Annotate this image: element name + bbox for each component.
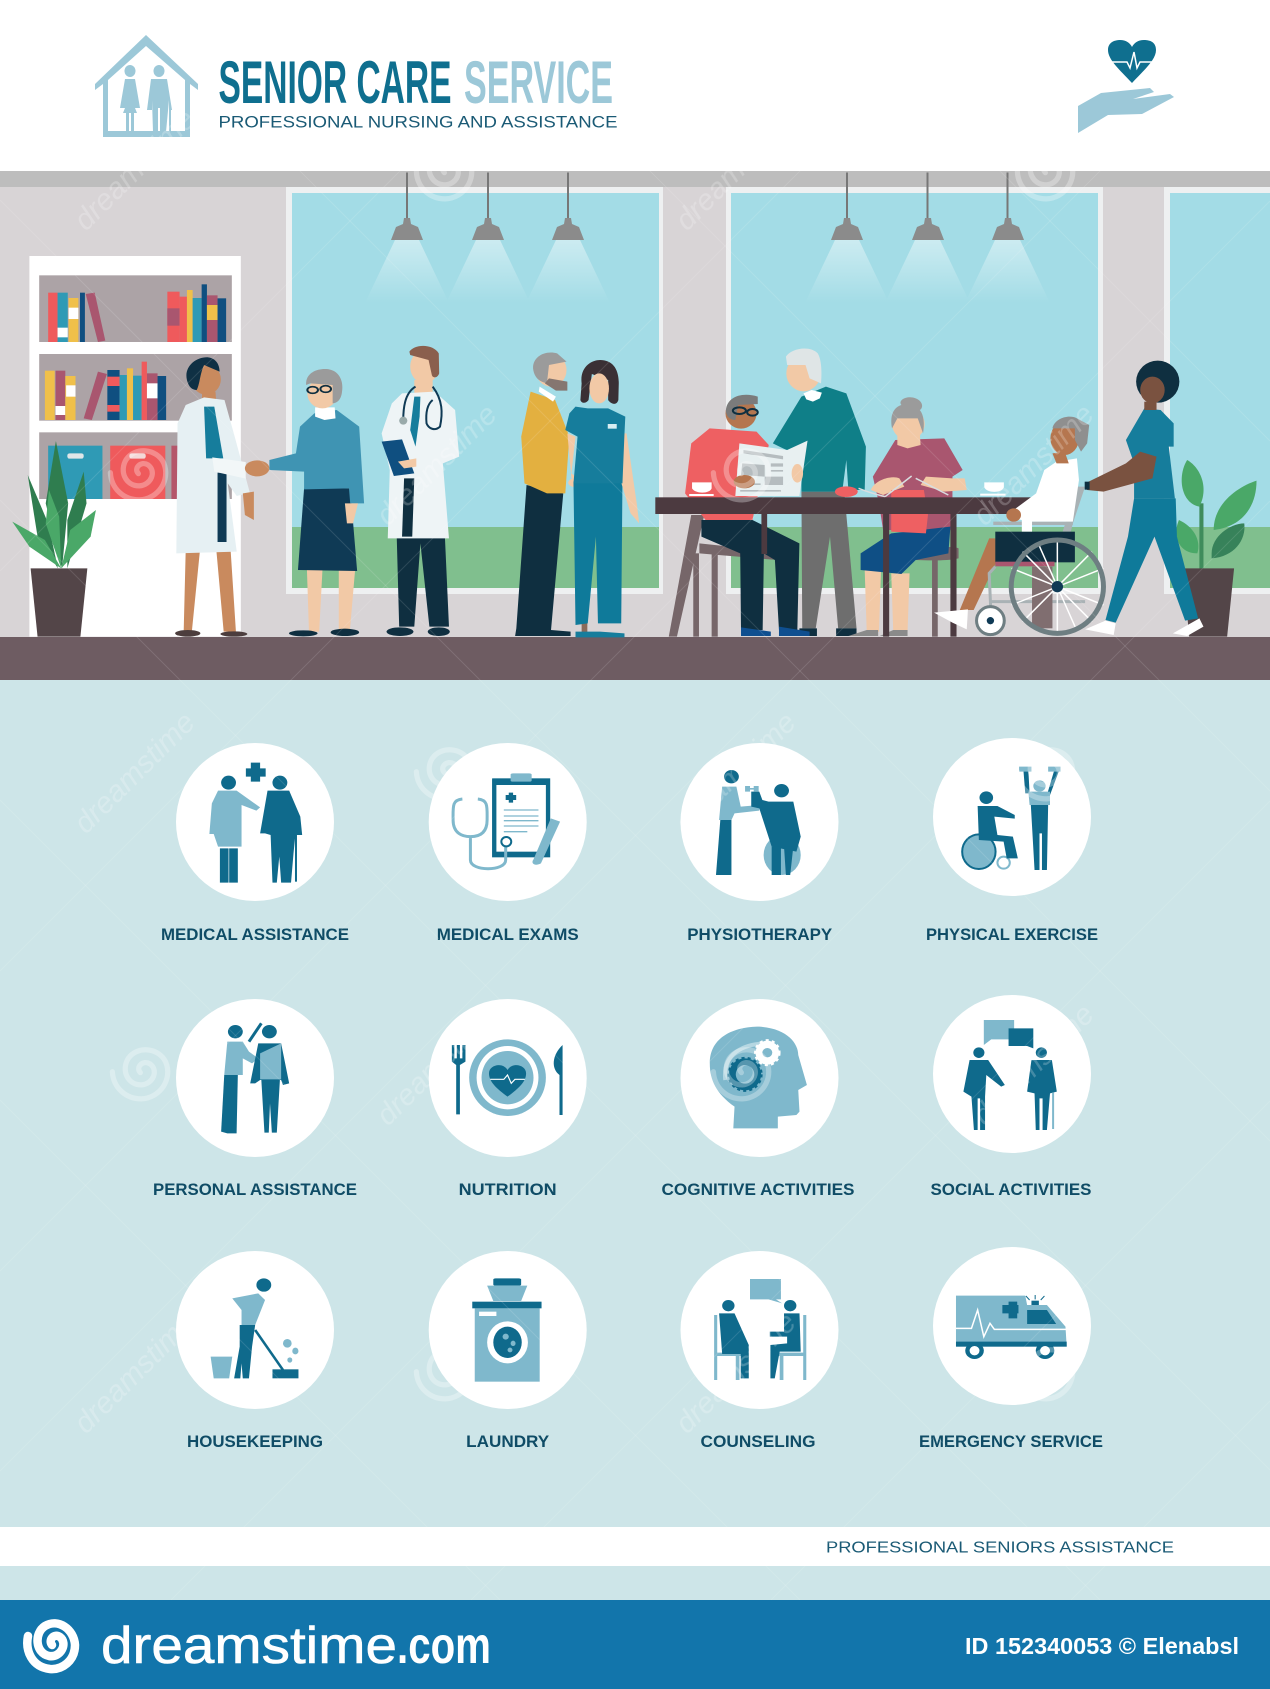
service labels: PHYSIOTHERAPY bbox=[687, 925, 833, 944]
title: SENIOR CARE bbox=[218, 49, 452, 116]
icon: nutrition bbox=[452, 1039, 563, 1116]
left half of scene bbox=[12, 256, 639, 637]
books middle shelf bbox=[45, 362, 166, 420]
dreamstime logo: .com bbox=[397, 1617, 491, 1675]
stock watermark: dreamstime bbox=[669, 706, 803, 840]
service labels bbox=[153, 925, 1103, 1451]
table bbox=[655, 482, 1039, 637]
dreamstime logo bbox=[27, 1617, 491, 1675]
newspaper bbox=[734, 441, 808, 496]
footer bar bbox=[0, 1600, 1270, 1689]
footer caption: PROFESSIONAL SENIORS ASSISTANCE bbox=[826, 1540, 1174, 1556]
right half of scene bbox=[655, 349, 1257, 637]
title: SERVICE bbox=[464, 49, 613, 116]
storage boxes bbox=[48, 446, 188, 499]
books top shelf bbox=[48, 284, 226, 342]
left chair bbox=[669, 515, 777, 637]
logo: house with seniors bbox=[95, 35, 198, 137]
icon: personal assistance bbox=[221, 1023, 289, 1133]
icon: physical exercise bbox=[962, 767, 1061, 870]
service labels: NUTRITION bbox=[459, 1180, 557, 1199]
icon: heart in hand bbox=[1078, 40, 1174, 133]
senior woman in blue sweater bbox=[269, 369, 364, 636]
stock watermark: dreamstime bbox=[967, 998, 1101, 1132]
icon: emergency service bbox=[956, 1295, 1067, 1359]
service labels: PHYSICAL EXERCISE bbox=[926, 925, 1098, 944]
icon: housekeeping bbox=[211, 1278, 298, 1378]
window right bbox=[1164, 187, 1270, 594]
service labels: COGNITIVE ACTIVITIES bbox=[662, 1180, 854, 1199]
nurse pushing wheelchair bbox=[1085, 361, 1203, 636]
stock watermark: dreamstime bbox=[669, 103, 803, 237]
seated man in red sweater bbox=[685, 395, 810, 636]
service labels: EMERGENCY SERVICE bbox=[919, 1432, 1103, 1451]
panel: services background bbox=[0, 680, 1270, 1600]
woman doctor bbox=[175, 357, 269, 637]
wheelchair with senior bbox=[934, 417, 1103, 635]
standing man in teal sweater bbox=[773, 349, 866, 636]
cups bbox=[689, 482, 1006, 496]
icons row 3 bbox=[211, 1278, 1067, 1382]
icon: medical assistance bbox=[209, 763, 302, 883]
panel: room scene bbox=[0, 171, 1270, 680]
image id credit: ID 152340053 © Elenabsl bbox=[965, 1633, 1239, 1659]
nurse with long hair bbox=[565, 360, 639, 637]
plant right bbox=[1176, 460, 1257, 637]
stock watermark: dreamstime bbox=[68, 1306, 202, 1440]
icons row 2 bbox=[221, 1020, 1057, 1133]
window left bbox=[286, 187, 663, 594]
service labels: HOUSEKEEPING bbox=[187, 1432, 323, 1451]
ceiling lamps bbox=[365, 173, 1050, 303]
stock watermark: dreamstime bbox=[967, 398, 1101, 532]
senior man with cane bbox=[515, 352, 587, 636]
service labels: PERSONAL ASSISTANCE bbox=[153, 1180, 357, 1199]
footer strip bbox=[0, 1527, 1270, 1566]
plant left bbox=[12, 441, 96, 637]
right chair bbox=[916, 547, 959, 637]
service labels: COUNSELING bbox=[700, 1432, 816, 1451]
window centre bbox=[726, 187, 1103, 594]
stock watermark: dreamstime bbox=[669, 1306, 803, 1440]
icon: laundry bbox=[472, 1278, 542, 1382]
dreamstime logo: dreamstime bbox=[101, 1617, 397, 1675]
service labels: MEDICAL ASSISTANCE bbox=[161, 925, 349, 944]
icons row 1 bbox=[209, 763, 1061, 883]
stock watermark: dreamstime bbox=[370, 398, 504, 532]
male doctor bbox=[382, 346, 459, 636]
ceiling band bbox=[0, 171, 1270, 187]
icon: counseling bbox=[714, 1279, 806, 1380]
stock watermark: dreamstime bbox=[68, 103, 202, 237]
service labels: LAUNDRY bbox=[466, 1432, 550, 1451]
white circles: service icons bbox=[176, 738, 1091, 1409]
subtitle: PROFESSIONAL NURSING AND ASSISTANCE bbox=[218, 114, 618, 132]
knitting woman bbox=[835, 397, 967, 636]
service labels: MEDICAL EXAMS bbox=[437, 925, 579, 944]
icon: medical exams bbox=[453, 773, 560, 869]
wall bbox=[0, 171, 1270, 637]
stock watermark: dreamstime bbox=[68, 706, 202, 840]
floor bbox=[0, 637, 1270, 680]
icon: physiotherapy bbox=[716, 770, 801, 875]
bookshelf bbox=[29, 256, 241, 637]
stock watermark: dreamstime bbox=[370, 998, 504, 1132]
icon: social activities bbox=[963, 1020, 1057, 1130]
header background bbox=[0, 0, 1270, 171]
service labels: SOCIAL ACTIVITIES bbox=[930, 1180, 1092, 1199]
icon: cognitive activities bbox=[710, 1027, 807, 1128]
